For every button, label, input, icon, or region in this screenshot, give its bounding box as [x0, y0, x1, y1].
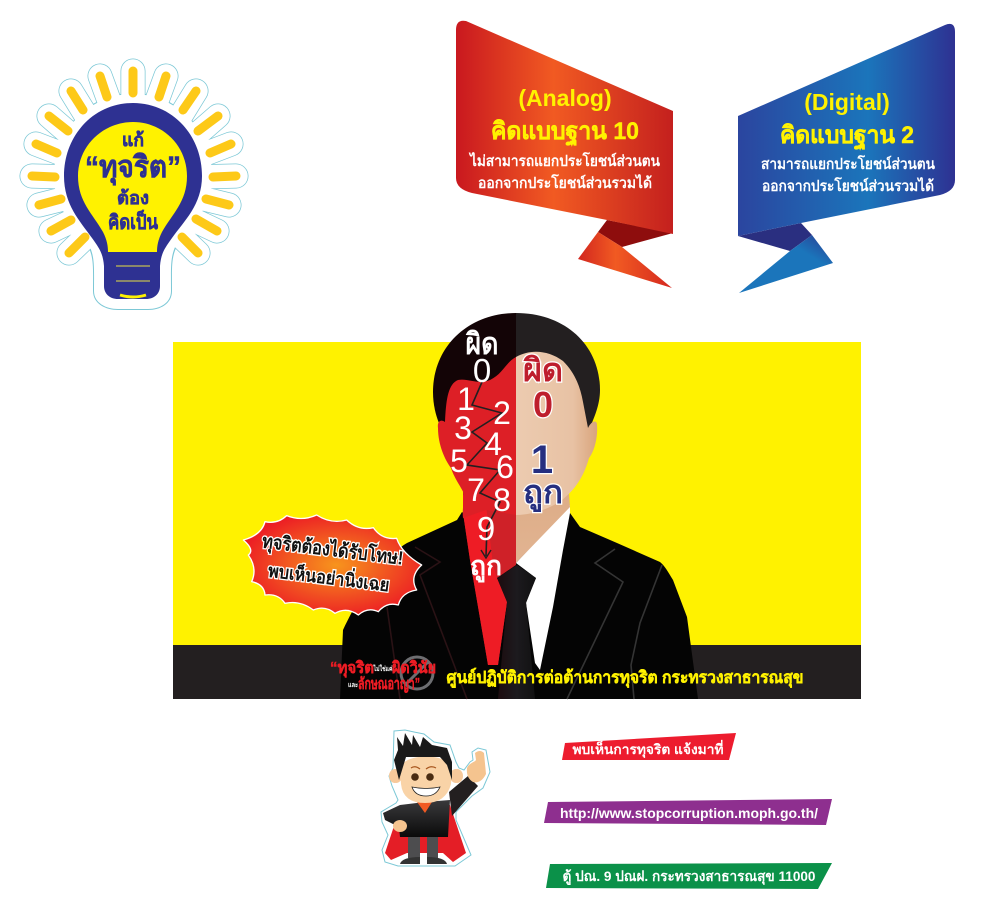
contact label: website [544, 799, 832, 825]
base 2 numbers: 0 [533, 384, 553, 425]
ribbon: analog base 10 [456, 21, 673, 288]
base 10 counting numbers: ถูก [470, 551, 502, 583]
face right skin [516, 352, 597, 515]
bulb text [85, 130, 181, 234]
face left red [438, 357, 516, 518]
mascot tie [417, 802, 432, 813]
base 10 counting numbers: 9 [477, 510, 495, 547]
base 10 counting numbers [450, 328, 514, 583]
ribbon text [761, 89, 936, 195]
burst text [261, 529, 405, 595]
burst text: พบเห็นอย่านิ่งเฉย [267, 558, 391, 595]
poster yellow background [173, 342, 861, 645]
base 2 numbers: 1 [531, 438, 553, 482]
poster dark footer [173, 645, 861, 699]
mascot hair [394, 733, 452, 780]
logo circle [401, 657, 433, 689]
bulb text: แก้ [122, 130, 144, 150]
label bar [562, 733, 736, 760]
mascot cape [385, 805, 466, 862]
bulb rays [32, 71, 236, 253]
base 10 counting numbers: 3 [454, 410, 472, 446]
mascot raised arm [449, 776, 478, 816]
necktie [497, 565, 536, 699]
mascot left hand [393, 820, 407, 832]
mascot hand thumbs-up [467, 751, 486, 782]
footer logo slogan [330, 657, 436, 694]
bulb text: “ทุจริต” [85, 151, 181, 186]
base 10 counting numbers: 4 [484, 426, 502, 462]
ribbon text: ออกจากประโยชน์ส่วนรวมได้ [762, 176, 934, 195]
base 10 counting numbers: 6 [496, 449, 514, 485]
base 10 counting numbers: 5 [450, 443, 468, 479]
ribbon text: สามารถแยกประโยชน์ส่วนตน [761, 154, 936, 173]
shirt collar [516, 505, 570, 670]
label text: http://www.stopcorruption.moph.go.th/ [560, 805, 818, 821]
base 10 counting numbers: 0 [473, 352, 491, 389]
ribbon text [468, 85, 661, 192]
bulb text: ต้อง [117, 188, 149, 208]
neck left red [463, 480, 516, 665]
icon: light bulb badge [32, 71, 236, 310]
burst shape [243, 515, 422, 615]
logo slogan text: ผิดวินัย [391, 659, 436, 677]
contact label: address [546, 863, 832, 889]
mascot legs [408, 835, 438, 858]
label text: พบเห็นการทุจริต แจ้งมาที่ [572, 739, 724, 758]
base 10 counting numbers: 1 [457, 381, 475, 417]
base 10 counting numbers: 8 [493, 482, 511, 518]
label text: ตู้ ปณ. 9 ปณฝ. กระทรวงสาธารณสุข 11000 [562, 868, 816, 885]
ribbon body [738, 24, 955, 236]
ribbon tail [739, 235, 833, 293]
suit lapel lines [387, 547, 662, 699]
ribbon text: คิดแบบฐาน 10 [491, 118, 639, 147]
burst text: ทุจริตต้องได้รับโทษ! [261, 529, 405, 571]
logo slogan text [330, 659, 436, 694]
neck right [516, 480, 570, 563]
mascot torso and left arm [383, 800, 450, 837]
ribbon: digital base 2 [738, 24, 955, 293]
label bar [544, 799, 832, 825]
hair right [516, 313, 600, 430]
base 10 counting numbers: ผิด [465, 328, 498, 361]
figure: man in suit [340, 313, 698, 699]
contact label: report [562, 733, 736, 760]
suit [340, 512, 698, 699]
panel: poster [173, 313, 861, 699]
ribbon text: (Digital) [804, 89, 890, 115]
base 2 numbers: ถูก [523, 474, 563, 513]
mascot face [400, 756, 452, 803]
bulb text: คิดเป็น [108, 209, 158, 234]
zigzag path arrow [467, 382, 502, 558]
bulb glass [78, 122, 187, 252]
ribbon body [456, 21, 673, 234]
ribbon text: ออกจากประโยชน์ส่วนรวมได้ [478, 173, 652, 192]
hair left [433, 313, 516, 430]
neck bright red strip [463, 495, 507, 665]
callout burst [243, 515, 422, 615]
sticker outline [32, 71, 236, 310]
logo slogan text: และ [348, 682, 358, 689]
ribbon fold [598, 220, 673, 247]
mascot sticker outline [381, 730, 490, 866]
base 10 counting numbers: 2 [493, 395, 511, 431]
base 2 numbers: ผิด [523, 352, 563, 388]
ribbon text: คิดแบบฐาน 2 [780, 122, 914, 151]
bulb body [64, 103, 202, 299]
ribbon fold [738, 223, 812, 251]
ribbon text: ไม่สามารถแยกประโยชน์ส่วนตน [468, 151, 661, 170]
ribbon text: (Analog) [518, 85, 612, 111]
bulb base threads [116, 266, 150, 297]
mascot eyes and smile [411, 767, 440, 796]
logo slogan text: ลักษณอาญา” [358, 675, 420, 694]
ribbon tail [578, 232, 672, 288]
footer text: ศูนย์ปฏิบัติการต่อต้านการทุจริต กระทรวงสาธารณสุข [446, 667, 804, 689]
base 2 numbers [523, 352, 563, 513]
icon: superhero mascot [381, 730, 490, 866]
mascot shoes [400, 857, 447, 864]
mascot ears [389, 769, 463, 783]
label bar [546, 863, 832, 889]
logo slogan text: “ทุจริต [330, 659, 374, 678]
logo slogan text: ไม่ใช่แค่ [373, 664, 393, 673]
base 10 counting numbers: 7 [467, 472, 485, 508]
